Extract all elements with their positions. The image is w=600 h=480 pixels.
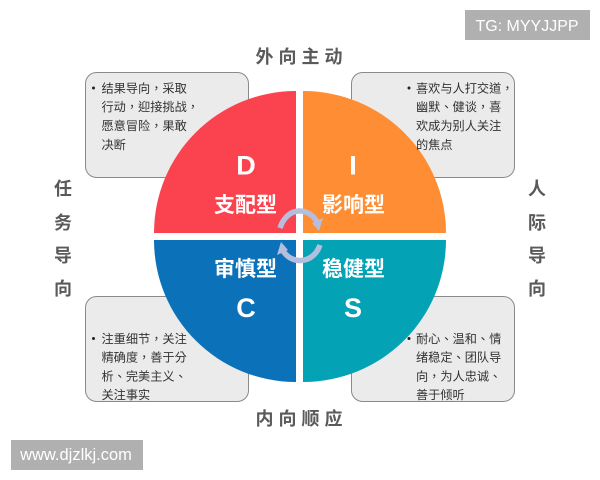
heading: left axis label	[54, 179, 72, 299]
watermark: top right: TG: MYYJJPP	[475, 18, 579, 35]
heading: right axis label: 际	[528, 213, 546, 233]
text: description top left: 结果导向，采取	[102, 80, 187, 96]
text: description top right: 幽默、健谈，喜	[416, 99, 501, 114]
heading: left axis label: 任	[54, 179, 72, 199]
quadrant: D dominant	[154, 91, 296, 233]
quadrant: S steady: S	[344, 293, 362, 323]
text: description top right: 喜欢与人打交道，	[416, 80, 514, 96]
quadrant: I influence: I	[349, 150, 357, 180]
quadrant: C conscientious: C	[236, 293, 256, 323]
arrow: upper curved arrow	[280, 211, 323, 231]
panel: box top right	[352, 72, 514, 178]
quadrant: D dominant: D	[236, 150, 256, 180]
heading: left axis label: 务	[54, 213, 72, 233]
quadrant: S steady: 稳健型	[322, 258, 385, 281]
heading: right axis label	[528, 179, 546, 299]
text: description top left: 行动，迎接挑战，	[102, 99, 199, 114]
watermark: top right	[465, 10, 590, 40]
text: description bottom left: 关注事实	[102, 387, 150, 402]
text: description top right: 的焦点	[416, 137, 453, 152]
panel: box bottom left	[86, 296, 248, 402]
heading: right axis label: 人	[528, 179, 546, 199]
text: description top left: 决断	[102, 137, 126, 152]
heading: right axis label: 向	[528, 279, 546, 299]
panel: box bottom right	[352, 296, 514, 402]
panel: box top left	[86, 72, 248, 178]
heading: bottom axis label: 内向顺应	[256, 408, 348, 429]
quadrant: S steady	[303, 240, 446, 382]
text: description top right	[408, 80, 514, 152]
watermark: bottom left: www.djzlkj.com	[19, 446, 132, 464]
heading: left axis label: 向	[54, 279, 72, 299]
quadrant: C conscientious	[154, 240, 296, 382]
heading: right axis label: 导	[528, 246, 546, 266]
text: description bottom left: 注重细节，关注	[102, 331, 187, 346]
quadrant: D dominant: 支配型	[214, 194, 277, 217]
text: description bottom left: 析、完美主义、	[102, 368, 187, 384]
text: description bottom left	[92, 331, 187, 402]
text: description top left	[92, 80, 199, 152]
quadrant: I influence	[303, 91, 446, 233]
text: description top right: 欢成为别人关注	[416, 118, 501, 133]
text: description top left: 愿意冒险，果敢	[102, 118, 187, 133]
heading: left axis label: 导	[54, 246, 72, 266]
arrow: lower curved arrow	[277, 242, 320, 261]
text: description bottom right	[408, 332, 501, 402]
quadrant: I influence: 影响型	[322, 194, 385, 217]
watermark: bottom left	[11, 440, 143, 470]
text: description bottom right: 耐心、温和、情	[416, 332, 501, 346]
text: description bottom right: 绪稳定、团队导	[416, 350, 501, 364]
quadrant: C conscientious: 审慎型	[214, 257, 277, 281]
text: description bottom left: 精确度，善于分	[102, 350, 187, 364]
heading: top axis label: 外向主动	[256, 47, 348, 67]
text: description bottom right: 善于倾听	[416, 387, 465, 402]
text: description bottom right: 向，为人忠诚、	[416, 368, 501, 384]
